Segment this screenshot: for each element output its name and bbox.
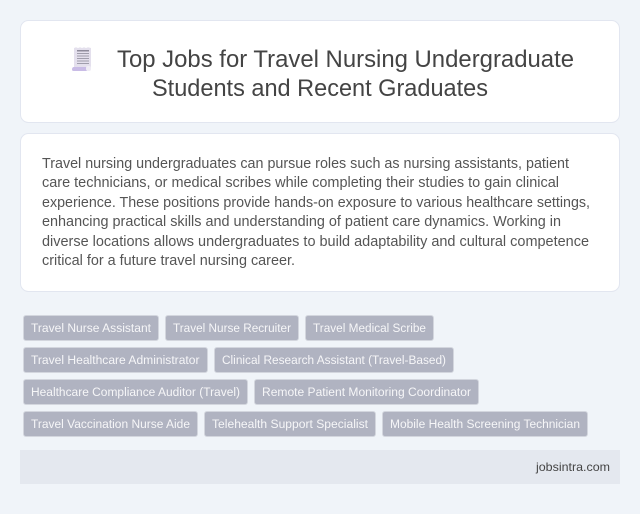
tag	[382, 412, 588, 436]
tag: Remote Patient Monitoring Coordinator	[262, 385, 471, 399]
tag	[24, 316, 158, 340]
tag	[24, 412, 198, 436]
tag: Travel Healthcare Administrator	[31, 353, 200, 367]
title	[117, 46, 574, 102]
text block: description: critical for a future travel nursing career.	[42, 252, 295, 269]
text block: description: care technicians, or medical scribes while completing their studies to gain clinical	[42, 174, 559, 191]
tag: Travel Medical Scribe	[313, 321, 426, 335]
tag: Travel Nurse Assistant	[31, 321, 152, 335]
icon: document scroll	[72, 47, 91, 71]
tag list: job titles	[24, 316, 588, 436]
text block: description: Travel nursing undergraduates can pursue roles such as nursing assistants, patient	[42, 155, 570, 172]
panel: header	[20, 20, 620, 122]
text block: description: experience. These positions provide hands-on exposure to various healthcare settings,	[42, 194, 590, 211]
panel: description	[20, 134, 620, 292]
tag	[24, 348, 208, 372]
tag	[214, 348, 454, 372]
tag: Clinical Research Assistant (Travel-Based)	[222, 353, 446, 367]
tag	[204, 412, 376, 436]
text block: description: diverse locations allows undergraduates to build adaptability and cultural competence	[42, 233, 589, 250]
text block: description	[42, 155, 590, 269]
footer	[20, 450, 620, 484]
tag: Telehealth Support Specialist	[212, 417, 369, 431]
tag	[24, 380, 248, 404]
tag	[166, 316, 298, 340]
title: Top Jobs for Travel Nursing Undergraduate	[117, 46, 574, 73]
tag: Travel Vaccination Nurse Aide	[31, 417, 190, 431]
title: Students and Recent Graduates	[152, 75, 488, 102]
tag	[254, 380, 478, 404]
tag: Travel Nurse Recruiter	[173, 321, 291, 335]
tag: Mobile Health Screening Technician	[390, 417, 580, 431]
text block: description: enhancing practical skills and understanding of patient care dynamics. Working in	[42, 213, 561, 230]
footer: jobsintra.com	[535, 460, 610, 474]
tag: Healthcare Compliance Auditor (Travel)	[31, 385, 240, 399]
tag	[306, 316, 434, 340]
